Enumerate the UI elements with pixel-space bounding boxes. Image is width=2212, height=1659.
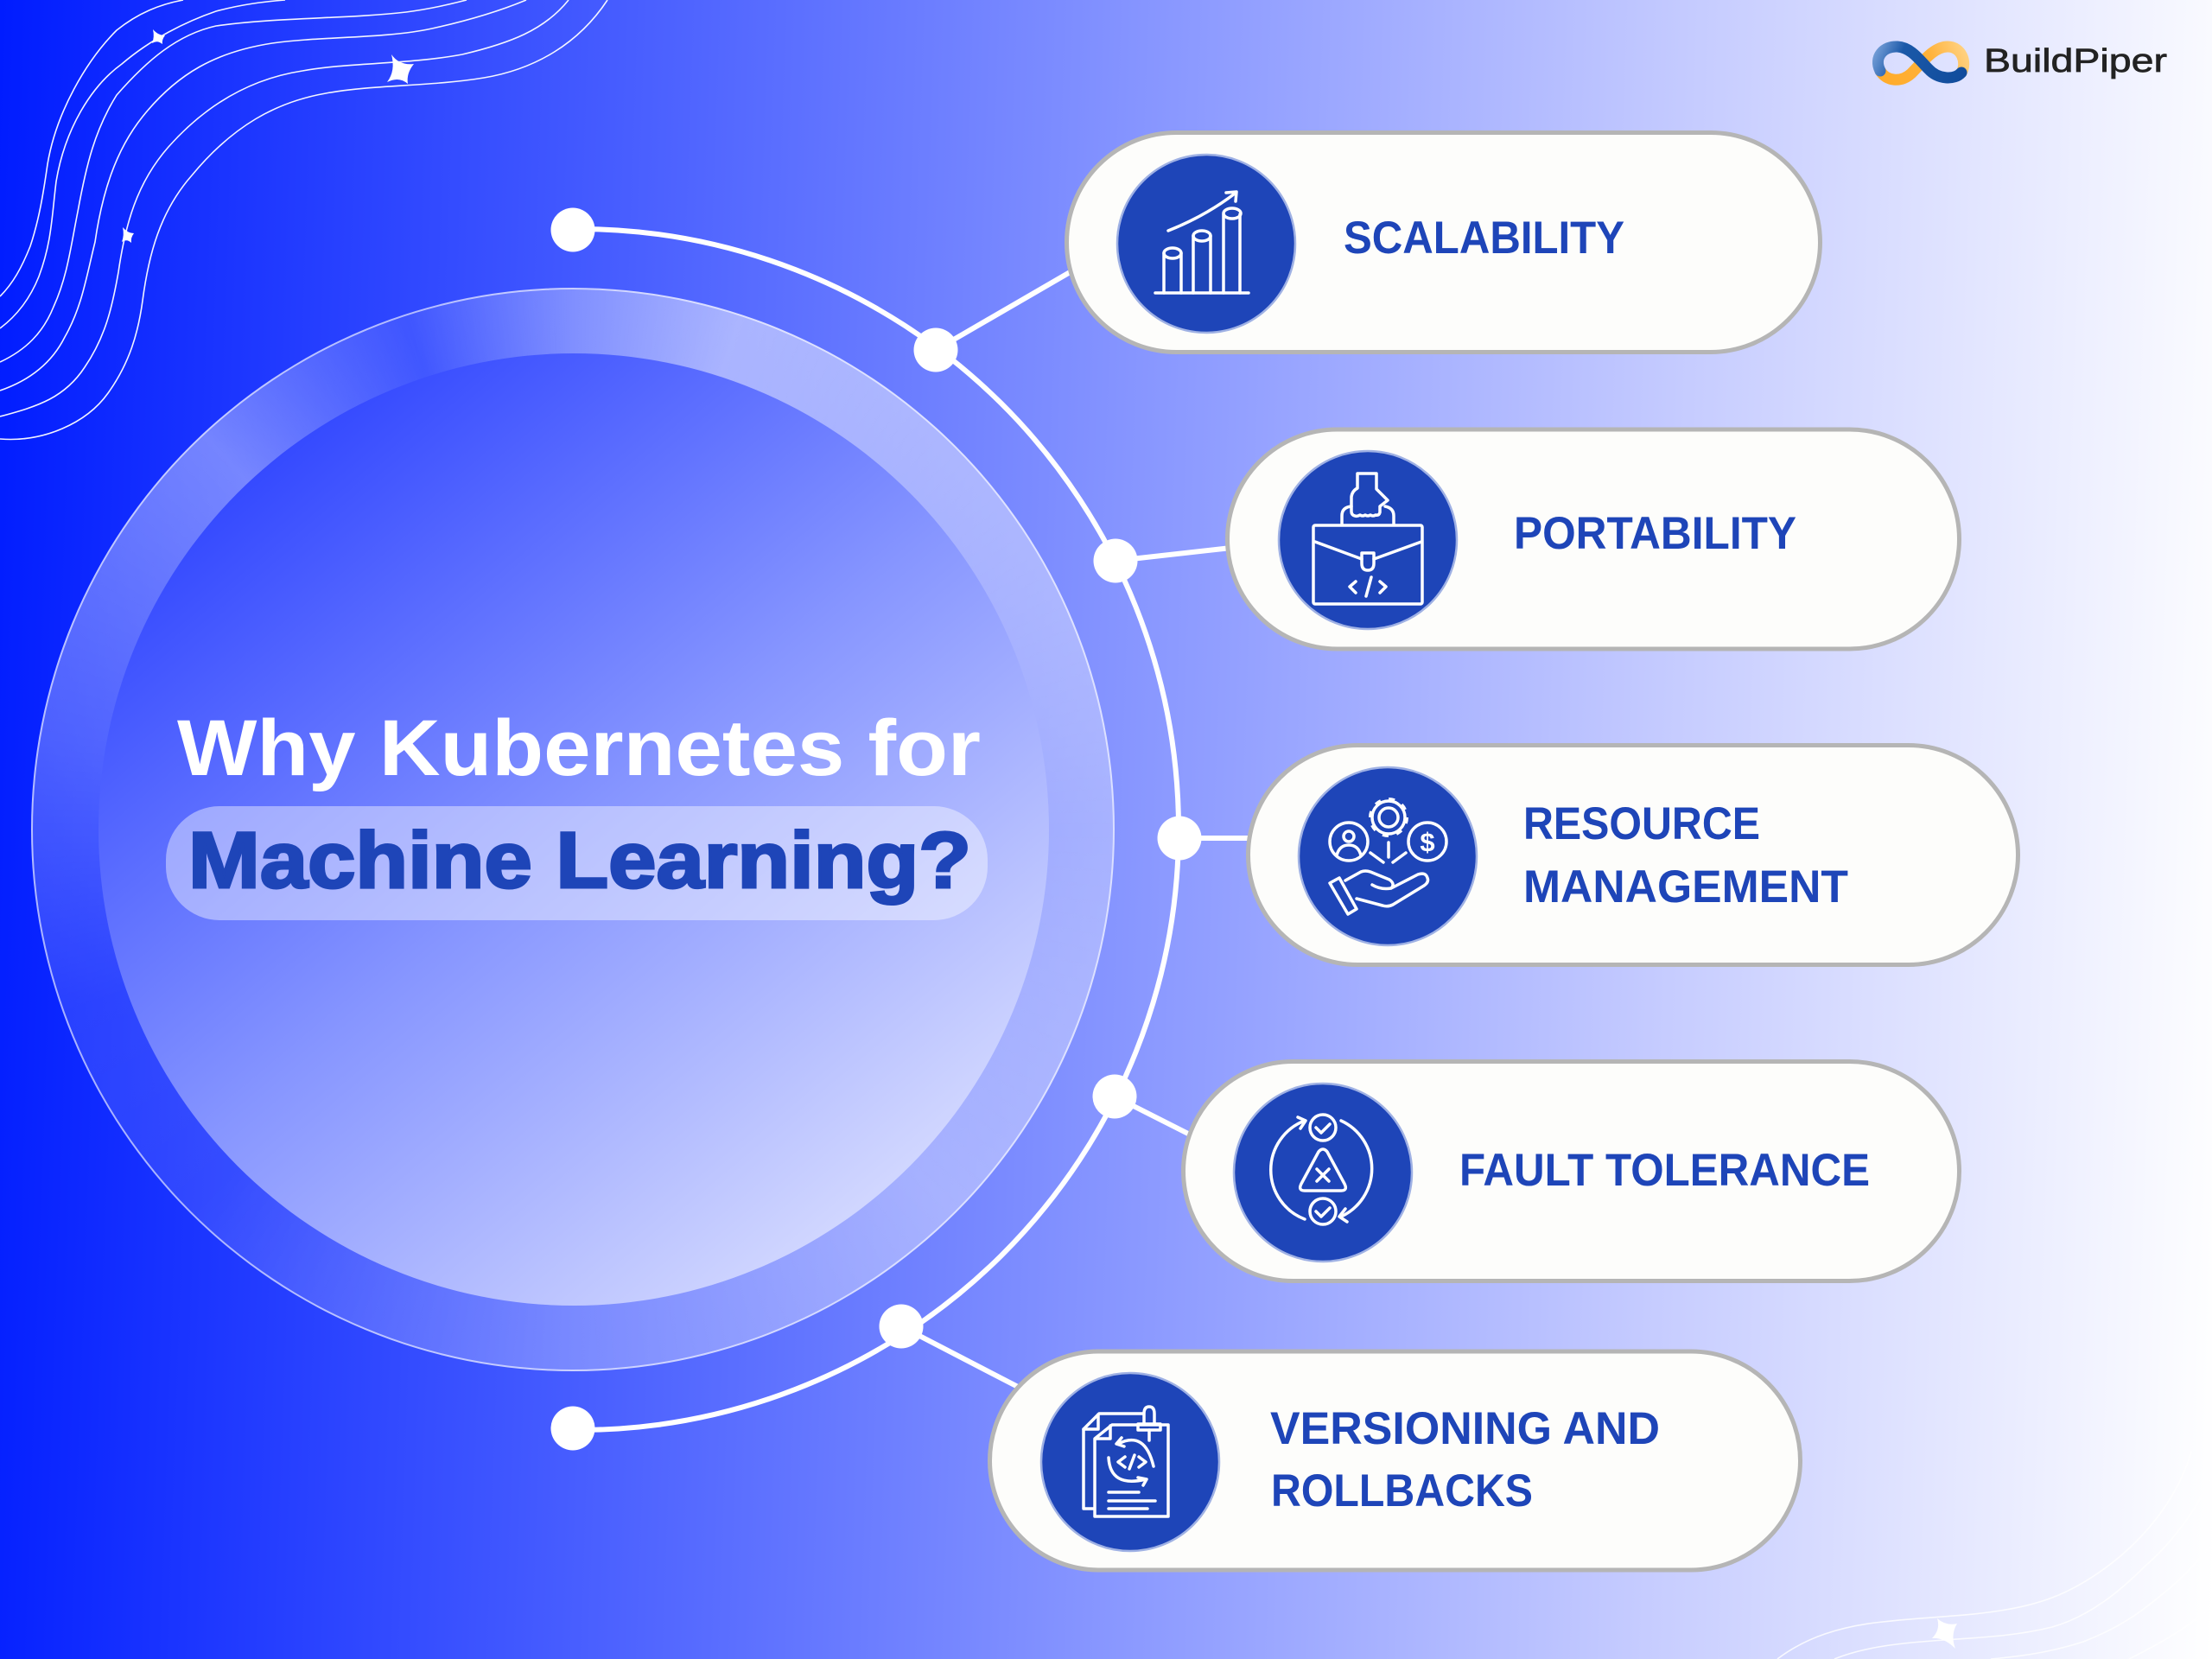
decorative waves bottom right	[1777, 1452, 2209, 1659]
panel: scalability	[1066, 133, 1820, 353]
inner central circle	[99, 353, 1049, 1306]
label: VERSIONING AND	[1270, 1403, 1660, 1454]
title line 2: Machine Learning?	[188, 817, 971, 905]
panel: resource management	[1248, 745, 2018, 964]
icon: fault cycle	[1271, 1115, 1372, 1224]
title line 1: Why Kubernetes for	[177, 704, 981, 792]
panel: portability	[1227, 429, 1960, 649]
panel: versioning and rollbacks	[990, 1351, 1801, 1570]
icon: growth bars	[1155, 192, 1249, 293]
icon: resource hand	[1330, 799, 1446, 914]
icon: versioned documents	[1084, 1407, 1168, 1516]
logo: BuildPiper: BuildPiper	[1984, 43, 2167, 79]
sparkle star bottom right	[1932, 1618, 1957, 1649]
logo: BuildPiper	[1878, 43, 2167, 79]
panel: versioning and rollbacks: ROLLBACKS	[1271, 1465, 1533, 1516]
label: RESOURCE	[1523, 798, 1760, 849]
glass ring around central circle	[31, 288, 1115, 1371]
panel: fault tolerance	[1184, 1061, 1960, 1281]
label: SCALABILITY	[1344, 213, 1624, 264]
icon: dollar sign: $	[1420, 827, 1435, 857]
icon: briefcase in hand	[1313, 474, 1422, 604]
title highlight pill	[166, 806, 988, 920]
panel: resource management: MANAGEMENT	[1523, 861, 1848, 912]
sparkle stars top left	[122, 29, 414, 243]
label: PORTABILITY	[1514, 508, 1796, 559]
label: FAULT TOLERANCE	[1459, 1145, 1870, 1196]
node dots	[551, 207, 1201, 1450]
main arc connecting nodes	[573, 229, 1179, 1430]
connector lines	[901, 271, 1251, 1388]
decorative waves top left	[0, 0, 607, 439]
